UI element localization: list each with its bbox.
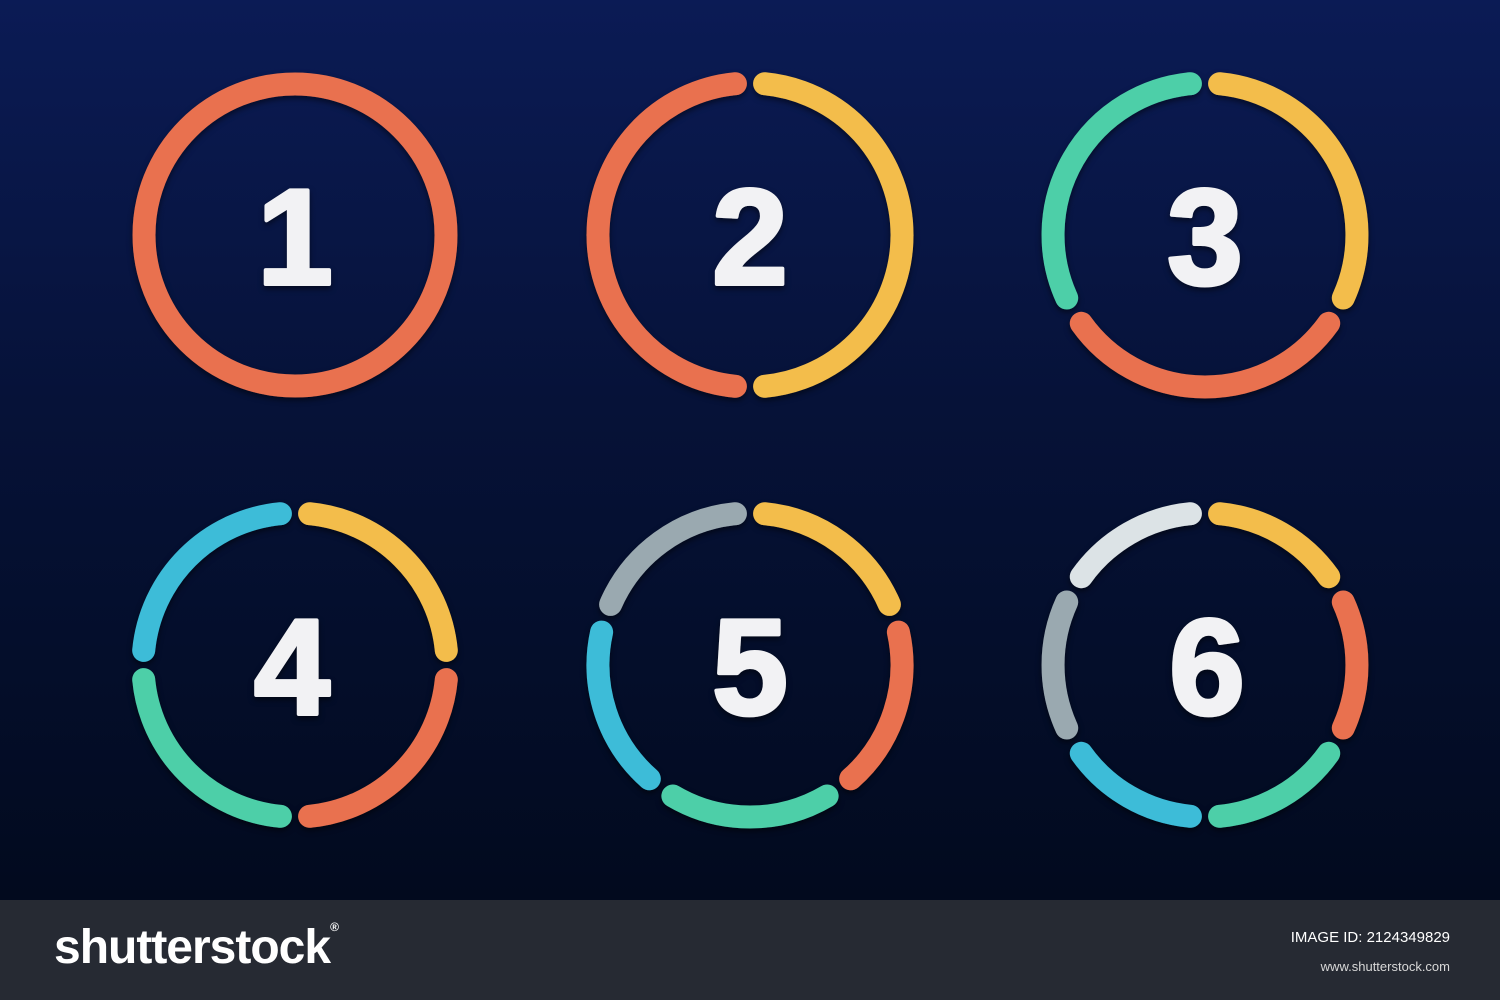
number 4: 4: [254, 591, 330, 743]
number 3: 3: [1167, 161, 1243, 313]
number 2: 2: [712, 161, 788, 313]
ring 1: [144, 84, 446, 386]
number 6: 6: [1169, 591, 1245, 743]
ring 3: [1053, 84, 1357, 387]
footer logo: shutterstock®: [54, 920, 338, 974]
ring 6: [1053, 514, 1357, 816]
website: www.shutterstock.com: [1321, 959, 1450, 974]
number 5: 5: [712, 591, 788, 743]
ring 2: [598, 84, 902, 386]
number 1: 1: [257, 161, 333, 313]
image id: IMAGE ID: 2124349829: [1291, 929, 1450, 946]
ring 4: [144, 514, 446, 816]
ring 5: [598, 514, 902, 817]
footer bar: [0, 900, 1500, 1000]
